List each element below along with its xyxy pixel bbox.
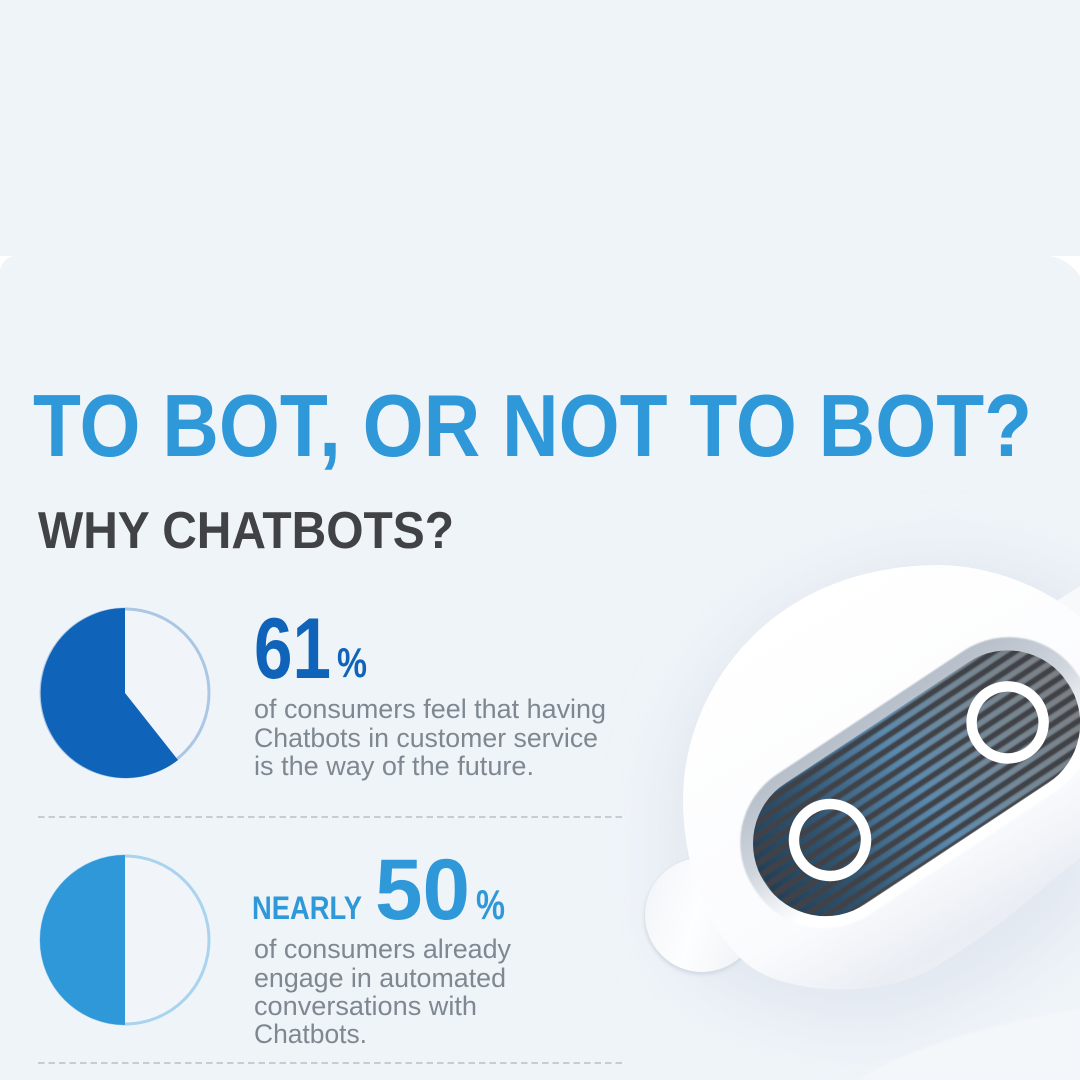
stat: nearly 50 percent — [252, 842, 505, 938]
robot antenna — [1058, 586, 1080, 640]
stat: nearly 50 percent: 50 — [375, 842, 470, 938]
visor rim — [709, 605, 1080, 960]
stat: 61 percent: 61 — [254, 601, 331, 697]
text: 50 percent description: engage in automated — [254, 963, 506, 993]
robot ear — [644, 858, 760, 975]
text: 50 percent description: Chatbots. — [254, 1019, 367, 1049]
right eye — [958, 673, 1058, 772]
stat: nearly 50 percent: NEARLY — [252, 890, 362, 926]
robot body — [860, 1008, 1080, 1080]
robot visor — [740, 636, 1080, 926]
text: 50 percent description: of consumers already — [254, 934, 511, 964]
background panel corners — [0, 256, 1080, 276]
text: 61 percent description — [254, 694, 606, 781]
subheading: WHY CHATBOTS? — [38, 502, 454, 560]
text: 61 percent description: is the way of the future. — [254, 751, 534, 781]
text: 61 percent description: Chatbots in customer service — [254, 723, 598, 753]
stat: 61 percent: % — [337, 639, 367, 686]
pie chart: 50% — [40, 855, 209, 1025]
visor glass — [753, 650, 1080, 916]
left eye — [780, 790, 880, 890]
text: 50 percent description — [254, 934, 511, 1049]
robot head — [683, 565, 1080, 989]
text: 61 percent description: of consumers feel that having — [254, 694, 606, 724]
text: 50 percent description: conversations with — [254, 991, 477, 1021]
robot illustration — [643, 565, 1080, 1014]
pie chart: 61% — [41, 608, 209, 778]
robot shadow — [665, 555, 1080, 1030]
stat: nearly 50 percent: % — [476, 881, 505, 928]
